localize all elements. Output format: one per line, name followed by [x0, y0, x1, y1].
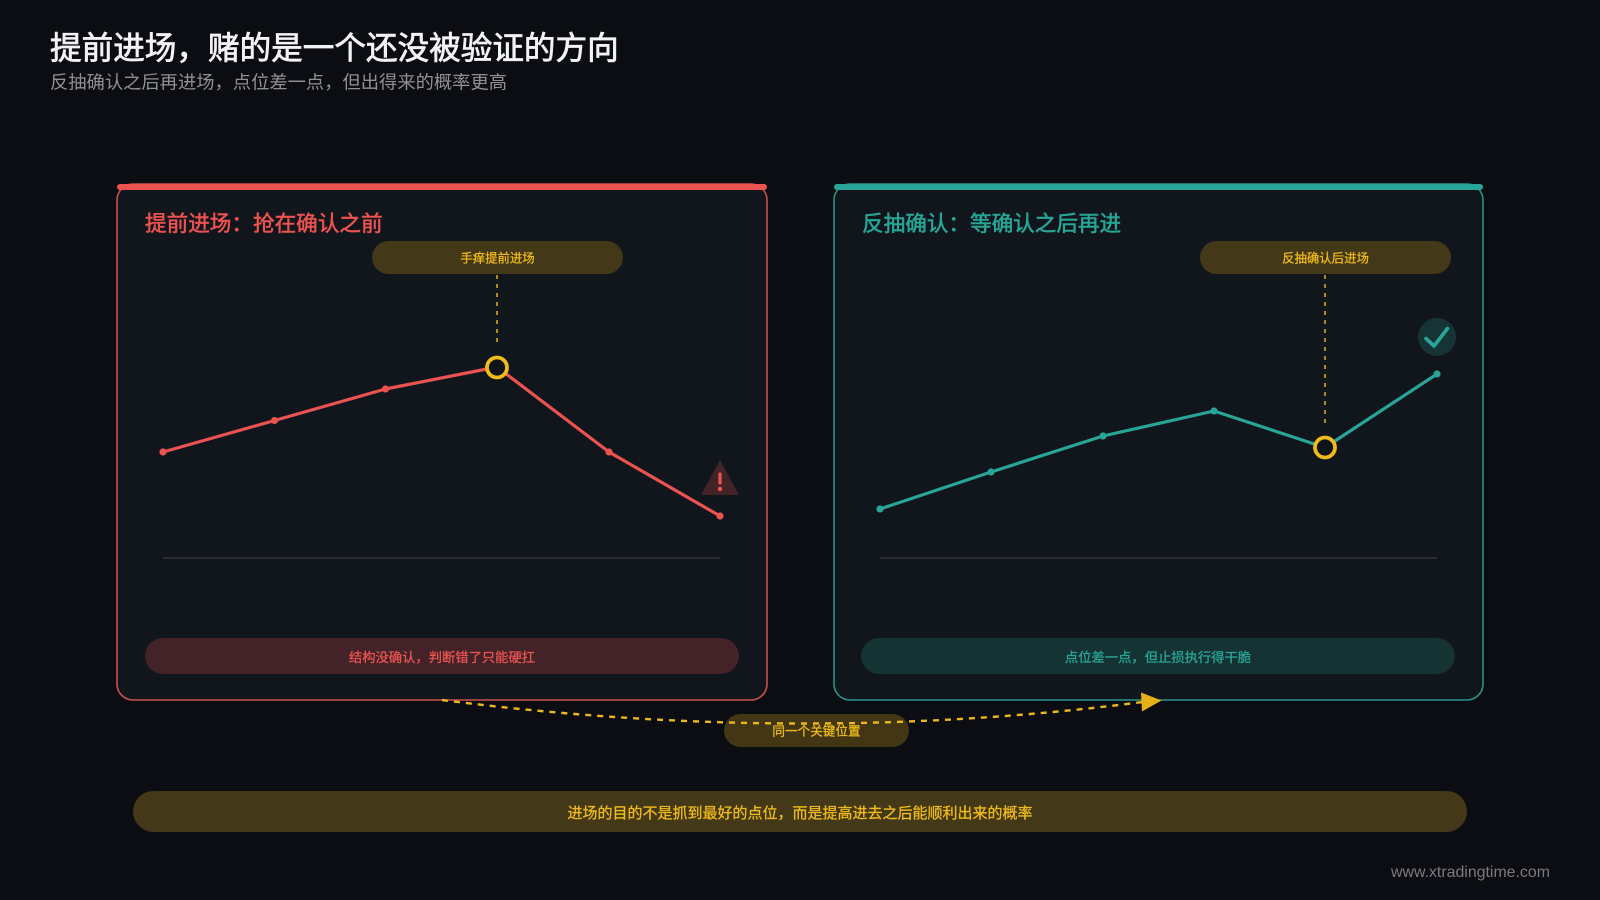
line chart: confirmed entry: [876, 370, 1441, 513]
conclusion banner: [133, 791, 1467, 832]
label pill: confirmed entry: [1200, 241, 1451, 274]
connector pill: same key level: [724, 714, 909, 747]
takeaway pill: early entry: [145, 638, 739, 674]
icon: warning triangle: [701, 460, 739, 495]
takeaway pill: early entry: 结构没确认，判断错了只能硬扛: [349, 650, 535, 665]
footer url: www.xtradingtime.com: [1390, 864, 1550, 881]
panel: confirmed entry: [834, 184, 1483, 700]
conclusion banner: 进场的目的不是抓到最好的点位，而是提高进去之后能顺利出来的概率: [567, 805, 1033, 822]
takeaway pill: confirmed entry: 点位差一点，但止损执行得干脆: [1065, 649, 1251, 665]
arrow: from left panel to right panel: [442, 692, 1162, 724]
label pill: confirmed entry: 反抽确认后进场: [1282, 252, 1369, 266]
panel heading: early entry: 提前进场：抢在确认之前: [145, 211, 383, 236]
takeaway pill: confirmed entry: [861, 638, 1455, 674]
connector pill: same key level: 同一个关键位置: [772, 724, 861, 738]
subtitle: 反抽确认之后再进场，点位差一点，但出得来的概率更高: [50, 72, 507, 92]
line chart: early entry: [159, 358, 724, 520]
panel: early entry: [117, 184, 767, 700]
panel heading: confirmed entry: 反抽确认：等确认之后再进: [862, 211, 1121, 236]
label pill: early entry: [372, 241, 623, 274]
title: 提前进场，赌的是一个还没被验证的方向: [50, 30, 619, 66]
label pill: early entry: 手痒提前进场: [460, 250, 535, 266]
entry connector: early: [496, 275, 498, 345]
icon: check badge: [1418, 318, 1456, 356]
entry connector: confirmed: [1324, 275, 1326, 426]
